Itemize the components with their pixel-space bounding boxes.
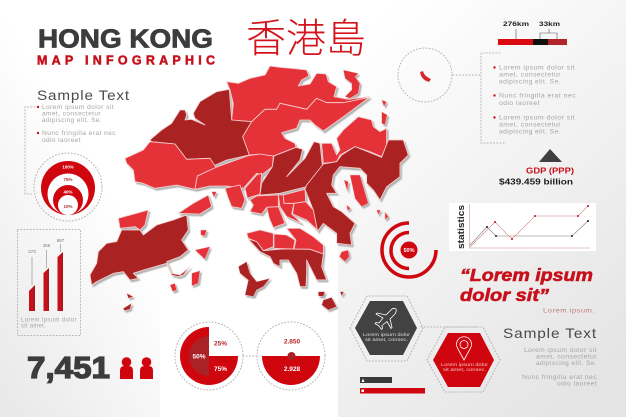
text block right [522, 348, 597, 388]
nested circles chart: 40% [63, 190, 73, 194]
scale bar with distances: 276km [503, 21, 529, 28]
bullet list right: adipiscing elit. Se. [499, 80, 561, 86]
pie chart: 75% [214, 366, 227, 373]
nested circles chart: 75% [63, 177, 73, 182]
bar chart panel: Lorem ipsum dolor [21, 318, 77, 324]
title [37, 24, 215, 67]
region: south districts [225, 173, 317, 230]
region: north-west [150, 89, 252, 166]
pie chart [175, 322, 243, 390]
icon: plane [375, 308, 396, 330]
region: centre [260, 142, 323, 195]
connector [421, 326, 478, 328]
bullet list right: Lorem ipsum dolor sit [499, 66, 575, 72]
text block right: Lorem ipsum dolor sit [524, 348, 597, 354]
bullet list right [453, 53, 576, 143]
bullet list right: amet, consectetur [499, 72, 561, 78]
heading: sample text left: Sample Text [37, 87, 130, 103]
connector [243, 355, 257, 357]
nested circles chart: 100% [62, 164, 74, 170]
dark hexagon with plane icon: sit amet, consec. [365, 337, 408, 342]
scale bar with distances [498, 21, 567, 45]
bullet list left: Lorem ipsum dolor sit [42, 105, 114, 111]
red hexagon with pin icon [427, 327, 500, 392]
title: MAP INFOGRAPHIC [37, 53, 215, 67]
title: HONG KONG [38, 24, 213, 54]
bullet list left [25, 105, 116, 194]
dark hexagon with plane icon: Lorem ipsum dolor [363, 332, 411, 337]
region: central band [195, 154, 273, 189]
dark islands [123, 262, 344, 311]
radial progress chart [382, 223, 436, 277]
red hexagon with pin icon: sit amet, consec. [443, 367, 486, 372]
heading: sample text right: Sample Text [503, 325, 597, 341]
GDP block [499, 149, 574, 186]
quote [460, 265, 593, 305]
line chart: statistics: statistics [456, 205, 466, 249]
bar chart panel [18, 230, 80, 336]
text block right: amet, consectetur [536, 354, 597, 360]
region: east [305, 140, 408, 245]
small islands [170, 70, 388, 292]
line chart: statistics [449, 203, 596, 251]
map of Hong Kong [90, 66, 408, 311]
region: Lantau [90, 195, 212, 285]
region: centre north [243, 97, 369, 156]
bar chart panel: sit amet. [21, 324, 46, 330]
bullet list right: Nunc fringilla erat nec [499, 94, 576, 100]
population figure: 7,451 [27, 350, 110, 385]
legend bars [360, 377, 425, 394]
bullet list right: Lorem ipsum dolor sit [499, 116, 575, 122]
region: north [227, 66, 369, 122]
region: north-east [322, 117, 387, 163]
bullet list right: amet, consectetur [499, 122, 561, 128]
bullet list left: Nunc fringilla erat nec [42, 131, 116, 137]
GDP block: GDP (PPP) [526, 166, 574, 176]
bar chart panel: 273 [28, 249, 36, 254]
quote attribution: Lorem ipsum. [543, 308, 595, 314]
chinese title: 香港島 [246, 6, 366, 64]
icon: location pin [456, 337, 472, 360]
nested circles chart [34, 153, 102, 221]
bullet list right: odio laoreet [499, 101, 540, 107]
semicircle chart [257, 322, 325, 390]
red hexagon with pin icon: Lorem ipsum dolor [441, 362, 489, 367]
GDP block: $439.459 billion [499, 176, 573, 186]
semicircle chart: 2.928 [284, 366, 301, 373]
region: Hong Kong Island [247, 228, 327, 287]
nested circles chart: 10% [63, 204, 73, 209]
text block right: odio laoreet [557, 382, 597, 388]
scale bar with distances: 33km [539, 21, 560, 28]
bullet list left: odio laoreet [42, 138, 81, 144]
bullet list left: amet, consectetur [42, 112, 101, 118]
radial progress chart: 50% [403, 248, 415, 254]
semicircle chart: 2.850 [284, 338, 301, 346]
text block right: adipiscing elit. Se. [536, 361, 597, 367]
quote: dolor sit” [460, 285, 549, 305]
quote: “Lorem ipsum [460, 265, 593, 285]
pie chart: 25% [214, 340, 227, 348]
region: west [125, 142, 216, 189]
bar chart panel: 456 [43, 243, 51, 248]
icon: people [120, 357, 153, 379]
bullet list left: adipiscing elit. Se. [42, 118, 102, 124]
pie chart: 50% [192, 354, 206, 360]
bar chart panel: 987 [57, 238, 65, 243]
locator circle [398, 48, 452, 102]
text block right: Nunc fringilla erat nec [522, 375, 597, 381]
bullet list right: adipiscing elit. Se. [499, 130, 561, 136]
dark hexagon with plane icon [350, 296, 423, 361]
